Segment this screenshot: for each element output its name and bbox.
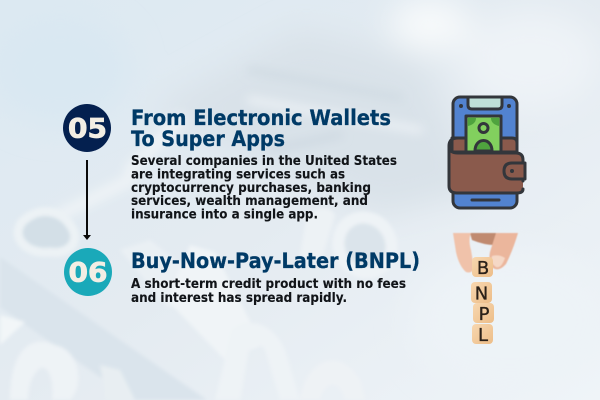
text block: super apps description: insurance into a single app. [131,208,318,222]
badge: 05 [63,104,111,152]
badge: 06: 06 [68,258,108,288]
letter block: P: P [479,304,490,325]
heading: From Electronic Wallets To Super Apps: From Electronic Wallets [131,106,391,130]
arrow: 05 to 06 [83,160,91,240]
text block: super apps description: Several companies in the United States [131,154,397,169]
text block: BNPL description: A short-term credit product with no fees [131,277,406,292]
heading: Buy-Now-Pay-Later (BNPL): Buy-Now-Pay-Later (BNPL) [131,249,420,273]
heading: From Electronic Wallets To Super Apps [131,106,391,151]
letter block: L: L [478,325,488,346]
heading: From Electronic Wallets To Super Apps: To Super Apps [131,127,285,151]
text block: super apps description: services, wealth management, and [131,194,368,209]
text block: super apps description: are integrating services such as [131,168,345,182]
text block: BNPL description [131,277,406,306]
badge: 05: 05 [68,114,107,144]
text block: super apps description [131,154,397,222]
badge: 06 [64,248,112,296]
letter block: N: N [475,284,488,304]
background: blurred 3D lettering [0,0,460,400]
letter block: B: B [477,258,489,279]
icon: wallet with phone and money [449,97,525,208]
text block: BNPL description: and interest has spread rapidly. [131,291,347,306]
photo: hand holding BNPL letter blocks [453,233,518,346]
text block: super apps description: cryptocurrency purchases, banking [131,181,371,196]
hand [453,233,518,272]
